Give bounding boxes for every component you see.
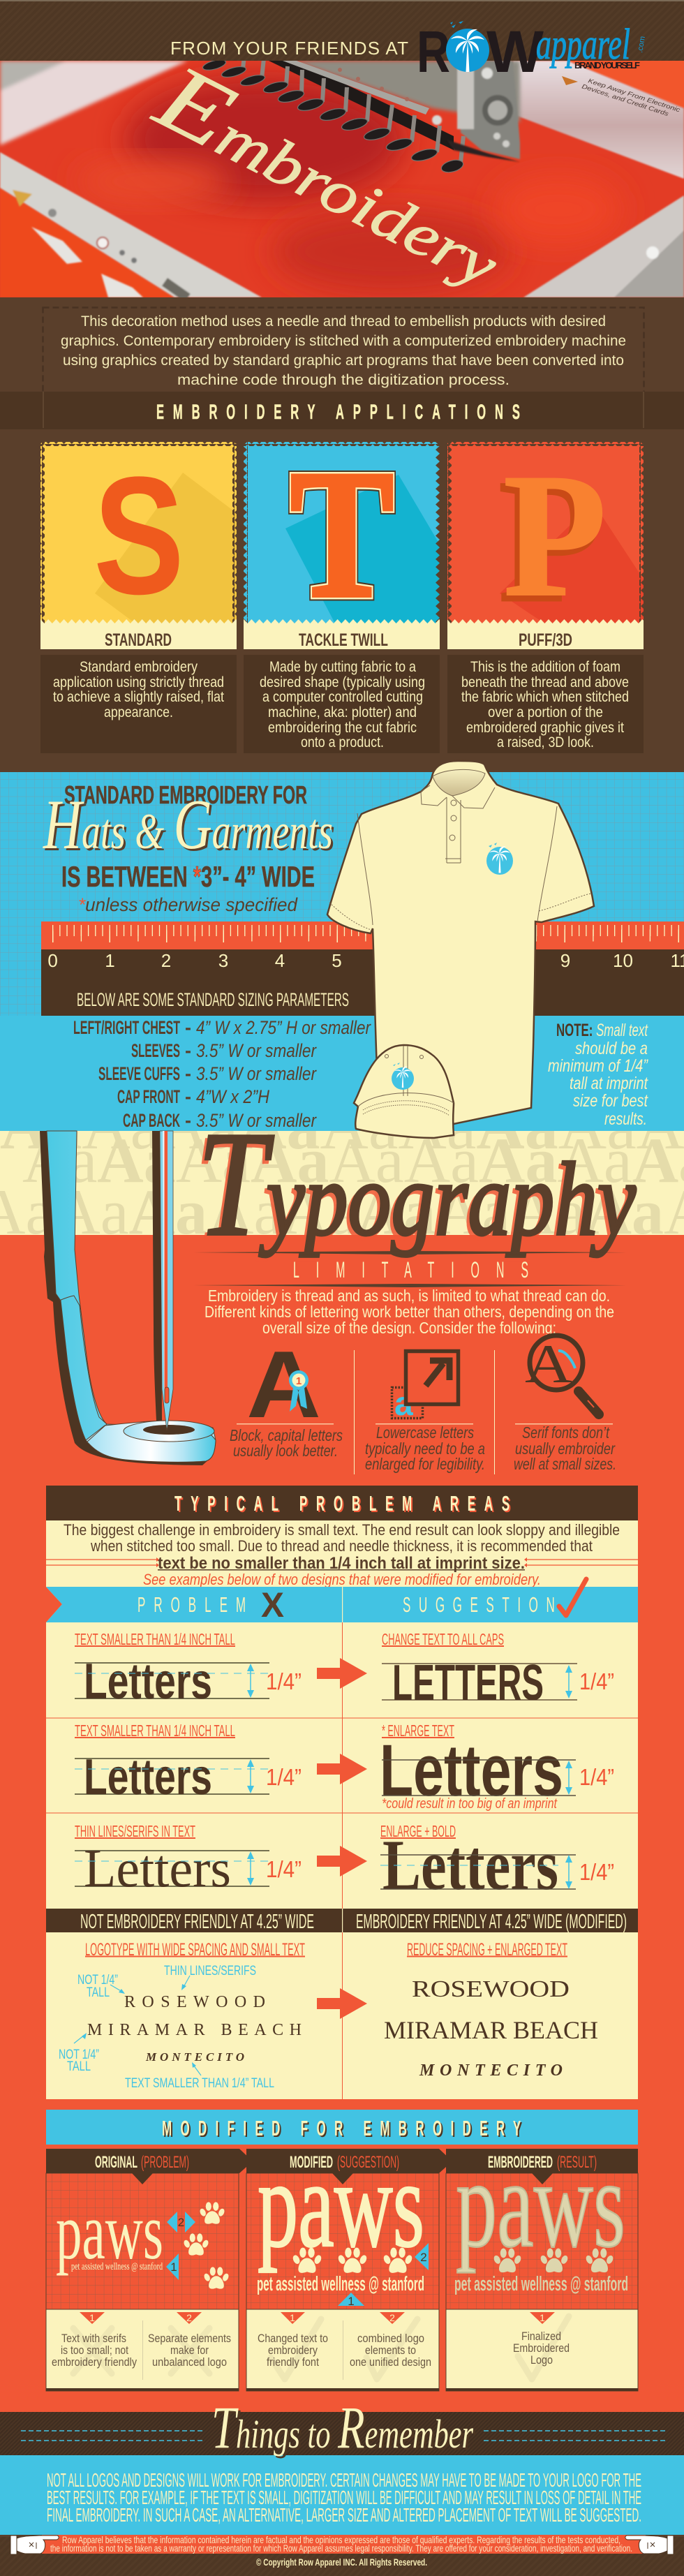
icon: enlarge lowercase [392,1352,458,1423]
logotype problem example: ROSEWOOD [124,1993,265,2011]
problem example: TEXT SMALLER THAN 1/4 INCH TALL [75,1630,235,1648]
icon caption dividers [355,1350,494,1474]
arrow [317,1754,367,1784]
logo: Row Apparel: R [417,19,450,84]
description: tackle twill: a computer controlled cutting [262,689,423,705]
markers [166,2212,195,2280]
suggestion example: 1/4” [579,1668,614,1694]
description: tackle twill: machine, aka: plotter) and [268,704,417,720]
script heading: hats and garments: Hats & Garments [43,785,333,864]
logo: pet assisted wellness @ stanford [71,2261,163,2272]
heading: embroidery applications [0,392,684,429]
ruler: 9 [560,950,570,971]
caption: block capital letters [230,1423,343,1460]
notes: friendly font [267,2355,319,2369]
panel: original [46,2149,253,2391]
problem and suggestion band: PROBLEM [137,1593,246,1617]
notes: Logo [530,2353,553,2367]
caption: block capital letters: usually look better. [233,1442,338,1460]
label: PUFF/3D [519,630,572,650]
caption: lowercase letters: Lowercase letters [376,1423,474,1442]
ruler: 3 [218,950,228,971]
logo: Row Apparel [417,19,647,84]
machine block [432,61,520,162]
note: tall at imprint [570,1074,648,1093]
heading: standard embroidery for: STANDARD EMBROIDERY FOR [64,780,307,809]
notes: Changed text to [258,2332,328,2345]
sizing parameters list: 4” W x 2.75” H or smaller [196,1017,371,1038]
notes: Finalized [521,2330,561,2343]
logotype suggestion example: ROSEWOOD [412,1976,570,2002]
markers: 2 [178,2216,184,2229]
problem example: TEXT SMALLER THAN 1/4 INCH TALL [75,1722,235,1740]
intro text block: graphics. Contemporary embroidery is stitched with a computerized embroidery machine [61,333,626,349]
caption: serif fonts [514,1423,616,1473]
recommendation text: The biggest challenge in embroidery is small text. The end result can look sloppy and illegible [64,1521,620,1539]
description: standard: to achieve a slightly raised, flat [53,689,224,705]
sizing parameters list: - [185,1040,191,1061]
sizing parameters list: CAP FRONT [117,1086,180,1107]
header [446,2149,638,2184]
panel: orange typography section background [0,1235,684,2412]
left frame [0,152,262,302]
panel: standard [40,442,237,650]
logo: Row Apparel: apparel [536,21,630,68]
panel: puff 3D [447,437,644,650]
sizing parameters list: 3.5” W or smaller [196,1063,317,1084]
logotype problem example: MIRAMAR BEACH [87,2021,302,2039]
logo: Row Apparel: .com [636,36,647,54]
problem example: 1/4” [266,1668,302,1694]
description: tackle twill: Made by cutting fabric to a [269,659,416,675]
recommendation text: See examples below of two designs that were modified for embroidery. [143,1571,541,1588]
arrow [317,1658,367,1689]
heading: embroidery applications: EMBROIDERY APPLICATIONS [156,401,520,424]
note [548,1021,648,1129]
problem and suggestion band [46,1579,638,1624]
logotype suggestion example [384,1940,598,2080]
header: (PROBLEM) [141,2153,189,2172]
logotype suggestion example: MONTECITO [419,2061,563,2080]
example row 2 [75,1722,614,1812]
sizing parameters list: 3.5” W or smaller [196,1040,317,1061]
letter S: S [94,442,184,629]
note: size for best [573,1091,648,1111]
letter T: T [290,433,394,635]
markers: 1 [170,2260,177,2274]
column and row dividers [46,1622,638,2099]
notes: embroidery friendly [52,2355,137,2369]
logotype comparison heading band [46,1909,638,1933]
ruler: 4 [275,950,285,971]
suggestion example: LETTERS [392,1655,544,1711]
problem example [75,1822,302,1898]
problem example [75,1722,302,1805]
heading band [46,1486,638,1520]
example row 3 [75,1822,614,1905]
logo: paws [56,2187,163,2276]
ruler: 10 [613,950,633,971]
description: standard [40,655,237,753]
intro text block: machine code through the digitization process. [177,372,510,388]
notes: one unified design [350,2355,431,2369]
header: MODIFIED [290,2153,333,2172]
logotype comparison heading band: NOT EMBROIDERY FRIENDLY AT 4.25” WIDE [80,1911,314,1933]
sizing parameters list: - [185,1110,191,1131]
notes: 1 [89,2312,95,2323]
heading: width range: IS BETWEEN *3”- 4” WIDE [61,860,315,893]
notes [246,2309,439,2391]
copyright: © Copyright Row Apparel INC. All Rights Reserved. [256,2556,427,2568]
note: minimum of 1/4” [548,1056,648,1076]
embroidered script title: Embroidery [140,44,522,307]
note: results. [604,1109,647,1129]
typography intro text [205,1287,614,1337]
notes: 1 [290,2312,295,2323]
panel: typical problem areas [46,1486,638,2099]
notes: 2 [389,2312,395,2323]
letter shadow [95,473,237,623]
ruler: 0 [47,950,58,971]
annotations: TEXT SMALLER THAN 1/4” TALL [125,2076,274,2091]
problem example: THIN LINES/SERIFS IN TEXT [75,1822,195,1840]
sizing parameters list: - [185,1086,191,1107]
subheading: limitations: LIMITATIONS [293,1258,528,1283]
ruler: 2 [161,950,171,971]
sizing parameters list: SLEEVES [131,1040,180,1061]
label: STANDARD [105,630,172,650]
suggestion example: 1/4” [579,1764,614,1790]
suggestion example: ENLARGE + BOLD [380,1822,456,1840]
notes [46,2309,239,2391]
description: tackle twill: embroidering the cut fabric [268,720,417,736]
letter shadow [500,517,644,623]
caption: lowercase letters [365,1423,485,1473]
recommendation text: when stitched too small. Due to thread and needle thickness, it is recommended that [90,1537,593,1555]
description: tackle twill: desired shape (typically using [260,674,425,690]
lower left corner fabric [0,188,174,297]
script heading: Things to Remember [211,2394,473,2461]
subheading: limitations [194,1251,626,1287]
header: (RESULT) [557,2153,597,2172]
suggestion example: *could result in too big of an imprint [382,1796,558,1812]
illustration: shirt [327,761,594,1124]
letter P: P [498,443,603,639]
top right corner fabric [567,61,684,108]
problem example: Letters [84,1838,231,1898]
header tagline: FROM YOUR FRIENDS AT [170,38,408,59]
problem and suggestion band: SUGGESTION [403,1593,555,1617]
notes: embroidery [268,2344,318,2357]
header: EMBROIDERED [488,2153,553,2172]
icon: right pointing hand [625,2536,674,2554]
logotype suggestion example: MIRAMAR BEACH [384,2016,598,2044]
panel: tackle twill [244,433,440,650]
problem example: Letters [84,1749,212,1805]
letter T: T [290,433,394,635]
sizing subheading: BELOW ARE SOME STANDARD SIZING PARAMETERS [77,989,349,1010]
suggestion example [382,1630,614,1711]
icon: serif magnifier: A [525,1333,572,1394]
caption: lowercase letters: typically need to be a [365,1439,485,1458]
background letter pattern [0,1131,684,1234]
typography intro text: overall size of the design. Consider the following: [262,1319,556,1337]
embroidered logo [454,2134,628,2295]
letter T: T [290,433,394,635]
header: (SUGGESTION) [337,2153,399,2172]
icon: serif magnifier [525,1333,599,1414]
markers: 2 [420,2251,427,2264]
sizing parameters list: 3.5” W or smaller [196,1110,317,1131]
ruler: 5 [332,950,342,971]
notes: Separate elements [148,2332,231,2345]
recommendation text: text be no smaller than 1/4 inch tall at imprint size. [158,1554,525,1573]
body text [47,2469,641,2526]
problem example: 1/4” [266,1764,302,1790]
sizing parameters list: - [185,1017,191,1038]
caption: lowercase letters: enlarged for legibility. [365,1455,485,1473]
illustration: presser foot [40,1131,216,1465]
notes: unbalanced logo [152,2355,227,2369]
logo: Row Apparel: W [486,19,544,84]
heading: modified for embroidery: MODIFIED FOR EMBROIDERY [163,2118,522,2142]
sizing parameters list: SLEEVE CUFFS [98,1063,180,1084]
annotations: THIN LINES/SERIFS [164,1964,256,1978]
needle heads [202,61,466,173]
markers: 1 [348,2295,355,2308]
description: standard: application using strictly thread [53,674,224,690]
logo: paws [258,2135,424,2273]
notes: 1 [540,2312,545,2323]
sizing parameters list: 4”W x 2”H [196,1086,269,1107]
label: TACKLE TWILL [299,630,388,650]
logotype problem example: MONTECITO [145,2050,244,2064]
suggestion example: Letters [382,1826,558,1905]
collar [329,769,590,930]
problem example [75,1630,302,1710]
caption: block capital letters: Block, capital letters [230,1426,343,1444]
suggestion example: CHANGE TEXT TO ALL CAPS [382,1630,504,1648]
letter shadow [285,475,440,623]
footer [0,2534,684,2576]
panel: embroidered [446,2134,638,2391]
problem and suggestion band: X [261,1585,284,1624]
logo [257,2135,424,2295]
ruler [41,921,684,1016]
notes: is too small; not [61,2344,128,2357]
notes: Text with serifs [61,2332,126,2345]
right frame: Devices, and Credit Cards [581,82,670,117]
notes: combined logo [357,2332,424,2345]
panel: things to remember [0,2394,684,2535]
intro text block: This decoration method uses a needle and thread to embellish products with desired [81,313,606,330]
hero photo: embroidery machine [0,61,684,297]
heading band: TYPICAL PROBLEM AREAS [174,1492,510,1516]
right frame: Keep Away From Electronic [587,77,681,114]
header band [0,0,684,61]
sizing parameters list [73,1017,371,1131]
arrow [317,1988,367,2019]
logotype problem example [59,1940,305,2091]
description: puff 3D: a raised, 3D look. [497,734,594,750]
caption: serif fonts: Serif fonts don’t [522,1423,610,1442]
illustration: needle [152,1131,173,1430]
intro text block [43,307,644,427]
sizing parameters list: CAP BACK [123,1110,180,1131]
heading: modified for embroidery: MODIFIED FOR EMBROIDERY [162,2117,521,2140]
annotations: TALL [87,1985,110,2000]
notes: 2 [186,2312,192,2323]
notes [446,2309,638,2391]
heading band: TYPICAL PROBLEM AREAS [176,1493,511,1517]
suggestion example: 1/4” [579,1859,614,1885]
illustration: cap [354,1045,454,1138]
description: puff 3D: embroidered graphic gives it [466,720,624,736]
panel: sizing background [0,772,684,1131]
notes: elements to [365,2344,416,2357]
annotations: NOT 1/4” [59,2048,99,2062]
header [46,2149,253,2184]
fabric [0,61,684,297]
description: standard: appearance. [104,704,173,720]
logo: Row Apparel: BRAND YOURSELF [574,60,640,71]
description: puff 3D: This is the addition of foam [470,659,620,675]
top left frame [0,61,188,145]
icon: left pointing hand [10,2536,59,2554]
typography intro text: Different kinds of lettering work better than others, depending on the [205,1303,614,1321]
ruler: 1 [105,950,115,971]
header [246,2149,452,2184]
icon: enlarge lowercase: a [394,1386,413,1423]
annotations: TALL [67,2059,91,2074]
logo: pet assisted wellness @ stanford [257,2273,424,2295]
recommendation text [46,1521,638,1588]
annotations [59,1964,274,2091]
right frame [513,61,684,179]
example row 1 [75,1630,614,1711]
arrow [317,1846,367,1877]
cream typography band [0,1131,684,1235]
notes: Embroidered [513,2341,570,2355]
letter P: P [503,437,607,633]
markers [338,2243,429,2308]
typography intro text: Embroidery is thread and as such, is limited to what thread can do. [208,1287,610,1305]
disclaimer [50,2534,632,2554]
description: puff 3D: over a portion of the [488,704,603,720]
problem example: 1/4” [266,1856,302,1882]
suggestion example: * ENLARGE TEXT [382,1722,454,1740]
sizing parameters list: - [185,1063,191,1084]
note: should be a [575,1039,648,1058]
lower right frame [523,195,684,297]
icon: block letter with ribbon: A [246,1331,321,1437]
panel: modified [246,2135,452,2391]
note: NOTE: Small text [556,1021,648,1040]
header: ORIGINAL [95,2153,137,2172]
suggestion example: Letters [380,1730,563,1812]
description: standard: Standard embroidery [80,659,198,675]
description: puff 3D: beneath the thread and above [461,674,629,690]
problem example: Letters [84,1654,212,1710]
icon: block letter with ribbon: 1 [296,1375,302,1387]
description: tackle twill: onto a product. [301,734,384,750]
machine plate and bar [269,61,520,150]
script heading: hats and garments: Hats & Garments [45,787,335,866]
caption: serif fonts: well at small sizes. [514,1455,616,1473]
intro text block: using graphics created by standard graphic art programs that have been converted into [63,353,624,369]
description: tackle twill [244,655,440,753]
description: puff 3D: the fabric which when stitched [461,689,629,705]
description: puff 3D [447,655,644,753]
footnote: *unless otherwise specified [78,894,298,915]
shirt logo [486,843,513,875]
sizing parameters list: LEFT/RIGHT CHEST [73,1017,180,1038]
heading: modified for embroidery [46,2110,638,2145]
script heading: Things to Remember [214,2396,475,2463]
caption: serif fonts: usually embroider [515,1439,616,1458]
notes: make for [170,2344,209,2357]
annotations: NOT 1/4” [77,1973,118,1987]
logotype problem example: LOGOTYPE WITH WIDE SPACING AND SMALL TEXT [85,1940,305,1960]
